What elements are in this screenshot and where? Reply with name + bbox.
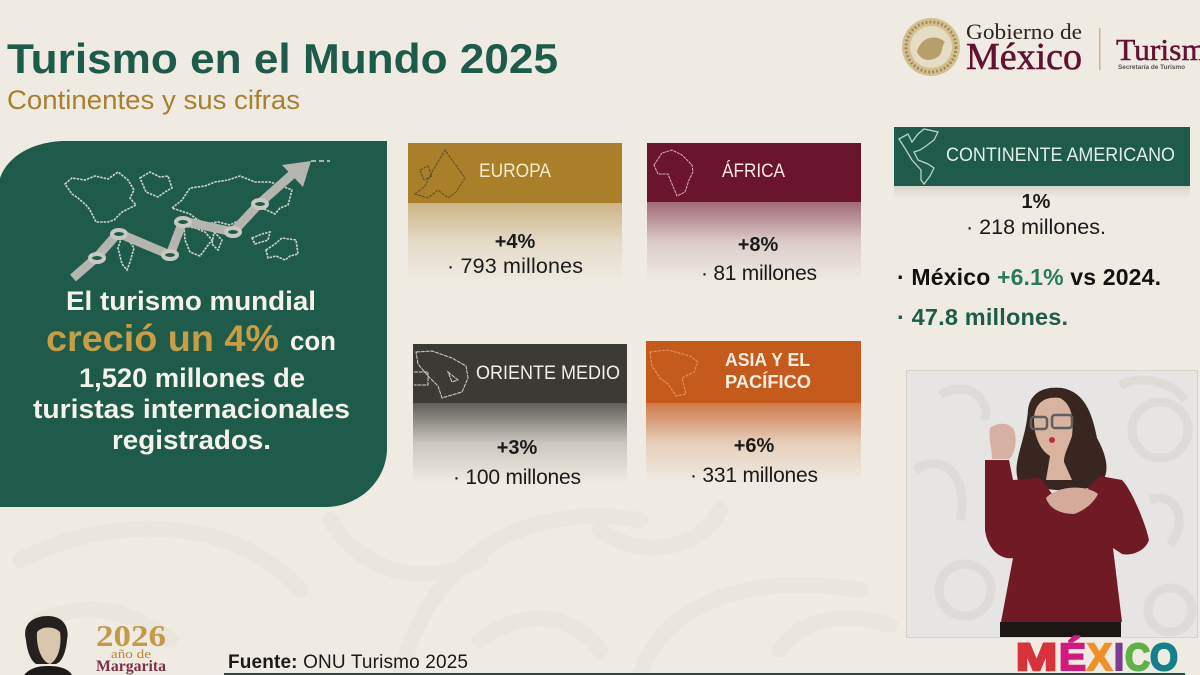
heading: ASIA Y EL (725, 350, 810, 370)
icon: Europe map (415, 150, 465, 198)
subtitle: Continentes y sus cifras (7, 85, 300, 115)
logo: México tourism brand (1016, 635, 1178, 675)
heading (725, 350, 811, 392)
panel: Continente Americano (894, 127, 1190, 239)
heading: ORIENTE MEDIO (476, 363, 620, 384)
panel text (33, 286, 350, 455)
figures: · 331 millones (690, 464, 818, 487)
figures: +8% (738, 234, 779, 256)
callout: México figures: · México +6.1% vs 2024. (897, 264, 1161, 290)
heading: ÁFRICA (722, 161, 785, 182)
figures (690, 435, 818, 487)
panel: Asia y el Pacífico (646, 341, 861, 487)
arrow (73, 161, 330, 278)
figures: +4% (495, 231, 536, 253)
callout: México figures: · 47.8 millones. (897, 304, 1068, 330)
glasses (1031, 415, 1072, 429)
figures (453, 437, 581, 489)
figures (701, 234, 817, 285)
figures: 1% (1022, 191, 1051, 213)
figures: · 793 millones (447, 254, 583, 278)
icon: Middle East map (414, 351, 468, 398)
panel: África (647, 143, 861, 285)
neck and face (1034, 398, 1073, 480)
figures (966, 191, 1106, 239)
panel: Europa (408, 143, 622, 283)
icon: Africa map (654, 150, 693, 196)
logo: 2026 año de Margarita: Margarita (96, 658, 166, 675)
panel text: con (290, 326, 336, 356)
heading: PACÍFICO (725, 371, 811, 392)
heading: EUROPA (479, 161, 551, 182)
panel text: El turismo mundial (66, 286, 316, 316)
hands (989, 424, 1016, 459)
figures (447, 231, 583, 278)
figures: +3% (497, 437, 538, 459)
panel: Oriente Medio (413, 344, 627, 489)
pants (1000, 622, 1121, 638)
panel text: 1,520 millones de (79, 363, 305, 393)
title: Turismo en el Mundo 2025 (7, 35, 558, 82)
figures: · 81 millones (701, 262, 817, 285)
logo: Gobierno de México / Turismo (902, 18, 1200, 78)
figures: · 218 millones. (966, 215, 1106, 239)
logo: Gobierno de México / Turismo: Secretaría de Turismo (1118, 65, 1185, 71)
panel: world tourism summary (0, 141, 387, 507)
icon: Americas map (899, 129, 938, 184)
photo: sign language interpreter (906, 370, 1198, 638)
logo: 2026 año de Margarita (96, 618, 166, 675)
figures: +6% (734, 435, 775, 457)
panel text: turistas internacionales (33, 394, 350, 424)
hair (1017, 388, 1106, 490)
sweater (985, 460, 1149, 622)
logo: Gobierno de México / Turismo: México (966, 36, 1082, 78)
icon: Asia map (650, 350, 698, 396)
panel text: creció un 4% (46, 318, 279, 359)
figures: · 100 millones (453, 466, 581, 489)
icon: national seal (902, 18, 960, 76)
panel text: registrados. (112, 425, 271, 455)
logo: Gobierno de México / Turismo: Gobierno de (966, 19, 1082, 44)
callout: México figures (897, 264, 1161, 330)
source note: Fuente: ONU Turismo 2025 (228, 652, 468, 673)
logo: 2026 año de Margarita: año de (111, 646, 151, 661)
icon: portrait of Margarita (24, 616, 72, 675)
icon: world map with growth arrow (65, 161, 330, 278)
heading: CONTINENTE AMERICANO (946, 145, 1175, 166)
logo: 2026 año de Margarita: 2026 (96, 618, 166, 653)
